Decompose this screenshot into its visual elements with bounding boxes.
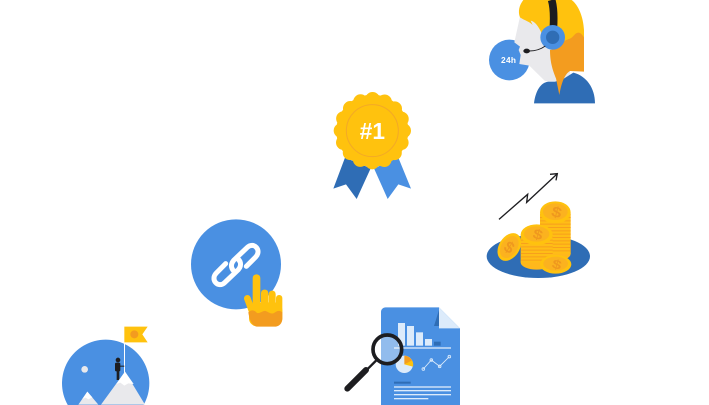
- line chart: [422, 355, 451, 370]
- icon: support agent with headset: [489, 0, 595, 103]
- bar chart: [394, 323, 451, 349]
- mountains: [78, 372, 145, 405]
- icon: 24h bubble: 24h: [501, 55, 516, 65]
- flag: [124, 327, 148, 342]
- icon: summit with flag: [62, 327, 149, 405]
- plate: [487, 235, 590, 278]
- agent hair: [519, 0, 584, 50]
- document page: [381, 307, 460, 405]
- short coin stack: $: [531, 227, 545, 244]
- moon: [81, 366, 88, 373]
- agent face: [514, 17, 570, 81]
- tilted coin: $: [500, 238, 517, 258]
- agent shoulders: [534, 73, 595, 103]
- icon: report document with magnifier: [347, 307, 460, 405]
- flag pole: [123, 327, 126, 375]
- agent hair shade: [550, 33, 584, 95]
- icon: link with pointing hand: [191, 219, 282, 327]
- blue disc: [191, 219, 281, 309]
- front coin: $: [550, 258, 564, 273]
- pointing hand: [247, 274, 282, 327]
- icon: #1 award ribbon: [333, 95, 411, 199]
- rosette: #1: [360, 118, 385, 144]
- pie chart: [396, 356, 413, 373]
- magnifier: [347, 335, 402, 389]
- climber: [115, 358, 124, 380]
- headset: [523, 0, 565, 53]
- page fold: [434, 307, 460, 328]
- ribbon tails: [333, 158, 411, 199]
- rising arrow: [499, 174, 557, 219]
- icon: coin stacks with rising arrow: [487, 174, 590, 278]
- tall coin stack: $: [550, 204, 563, 222]
- blue disc: [62, 340, 149, 405]
- chain links: [214, 245, 258, 285]
- text lines: [394, 382, 451, 399]
